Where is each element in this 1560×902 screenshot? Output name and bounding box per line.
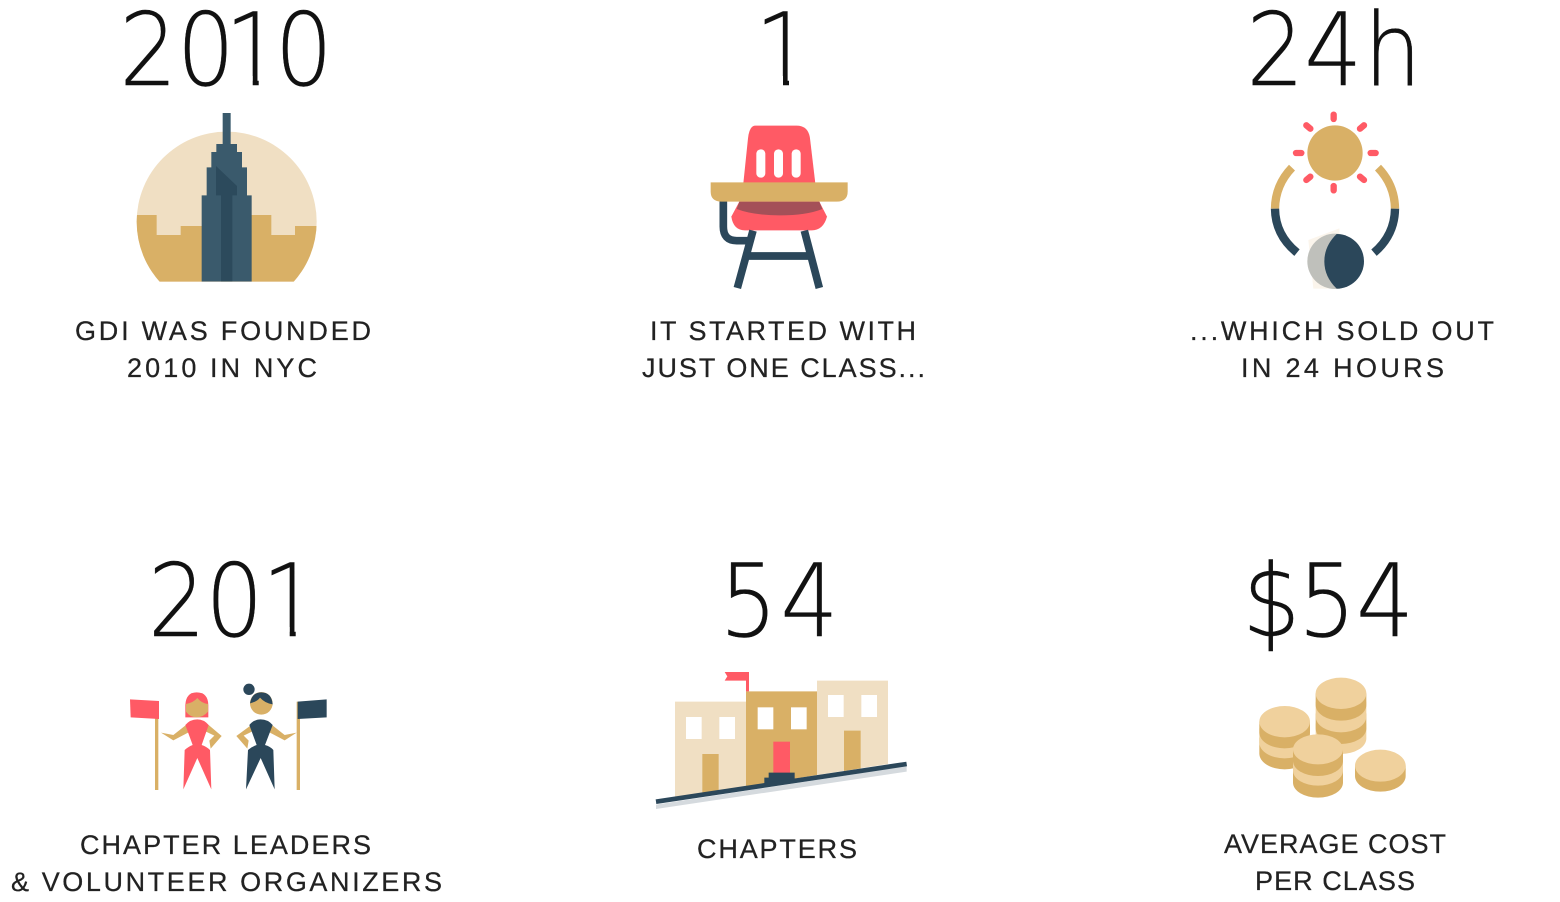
caption	[642, 316, 925, 383]
caption: CHAPTERS	[697, 834, 857, 864]
caption	[1190, 316, 1494, 383]
caption: IN 24 HOURS	[1241, 353, 1444, 383]
number: 201: 2	[148, 542, 206, 660]
number: 201	[148, 542, 322, 660]
caption: JUST ONE CLASS...	[642, 353, 925, 383]
caption: GDI WAS FOUNDED	[75, 316, 371, 346]
caption: ...WHICH SOLD OUT	[1190, 316, 1494, 346]
icon: two leaders with flags	[130, 684, 327, 790]
caption: CHAPTER LEADERS	[80, 830, 371, 860]
number: 201: 0	[206, 542, 263, 660]
number: 2010	[119, 0, 333, 109]
caption	[75, 316, 371, 383]
panel: sold out in 24 hours	[1190, 0, 1494, 383]
panel: chapter leaders	[11, 542, 442, 897]
caption: IT STARTED WITH	[650, 316, 916, 346]
number: 54: 5	[720, 542, 777, 660]
caption: AVERAGE COST	[1224, 829, 1446, 859]
number: 54: 4	[781, 542, 838, 660]
number: $54: 5	[1298, 542, 1356, 660]
caption	[11, 830, 442, 897]
panel: founded 2010	[75, 0, 371, 383]
caption	[1224, 829, 1446, 896]
number: 201: 1	[262, 542, 320, 660]
number: $54: 4	[1356, 542, 1414, 660]
caption: PER CLASS	[1255, 866, 1415, 896]
icon: Empire State Building	[136, 113, 317, 282]
icon: stacks of coins	[1259, 678, 1406, 798]
caption: 2010 IN NYC	[127, 353, 317, 383]
caption: & VOLUNTEER ORGANIZERS	[11, 867, 442, 897]
panel: average cost	[1224, 542, 1446, 896]
icon: school desk chair	[711, 126, 848, 288]
icon: sun and moon	[1275, 115, 1395, 289]
panel: one class	[642, 0, 925, 383]
panel: chapters	[656, 542, 907, 864]
number: $54: $	[1243, 542, 1300, 660]
icon: row of buildings	[656, 672, 907, 809]
